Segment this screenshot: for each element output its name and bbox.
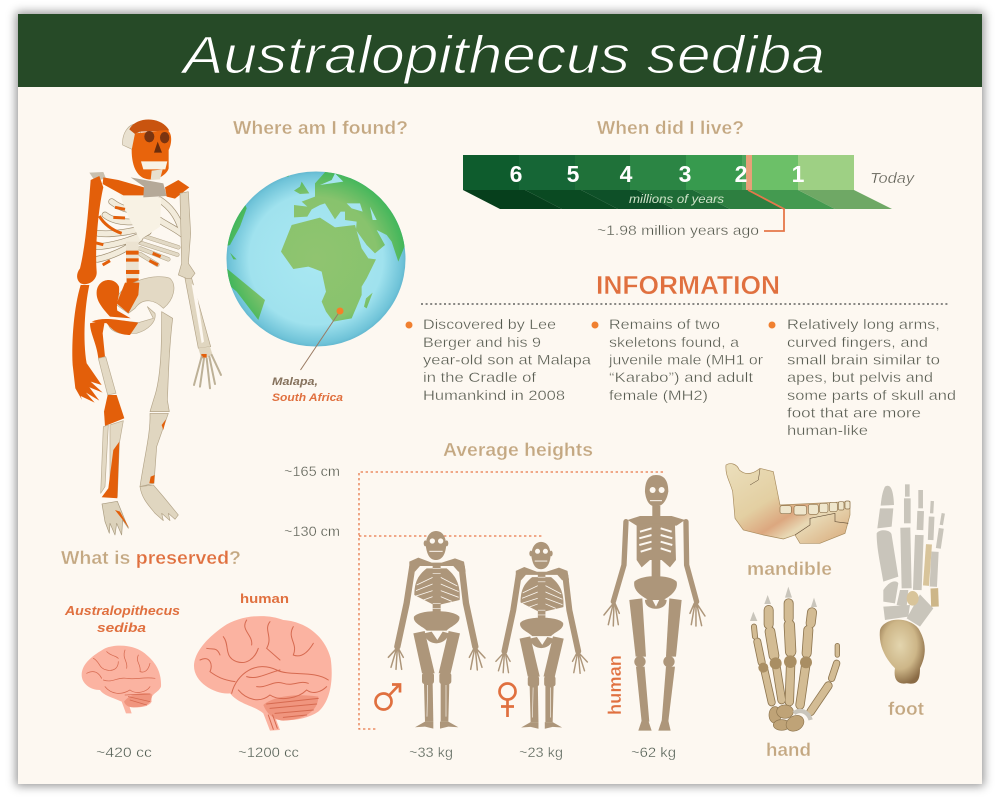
- information column 1: [406, 316, 591, 403]
- timeline numbers: [510, 161, 805, 187]
- pelvis: [92, 277, 174, 335]
- preserved arm: [72, 176, 103, 403]
- heading: what is preserved: What is preserved ?: [61, 548, 241, 568]
- information column 3: Relatively long arms,: [787, 316, 940, 332]
- information column 2: juvenile male (MH1 or: [608, 352, 763, 368]
- silhouette: sediba female: [496, 542, 587, 729]
- label: hand: hand: [766, 740, 811, 760]
- axis caption: millions of years: [629, 194, 724, 206]
- weight labels: ~23 kg: [519, 744, 563, 760]
- height guides: [359, 472, 663, 729]
- information column 1: in the Cradle of: [423, 369, 536, 385]
- date label: ~1.98 million years ago: [597, 222, 759, 238]
- information column 1: Berger and his 9: [423, 334, 541, 350]
- height label 130 cm: ~130 cm: [284, 523, 340, 539]
- information column 3: human-like: [787, 422, 868, 438]
- information column 2: female (MH2): [609, 387, 708, 403]
- today label: Today: [870, 170, 916, 187]
- heading: information: INFORMATION: [596, 270, 780, 300]
- timeline numbers: 6: [510, 161, 522, 187]
- brain volume labels: [96, 744, 299, 760]
- information column 1: year-old son at Malapa: [423, 352, 591, 368]
- female symbol: [500, 684, 516, 717]
- locator: Malapa: [272, 308, 344, 404]
- title: Australopithecus sediba: [180, 26, 825, 85]
- timeline numbers: 4: [620, 161, 633, 187]
- title banner: [18, 14, 982, 87]
- country label: South Africa: [272, 392, 343, 404]
- main skeleton with preserved bones: [72, 119, 221, 535]
- timeline numbers: 5: [567, 161, 580, 187]
- weight labels: [409, 744, 676, 760]
- label: mandible: mandible: [747, 559, 832, 579]
- information column 2: “Karabo”) and adult: [609, 369, 753, 385]
- heading: when did I live: When did I live?: [597, 118, 744, 138]
- information column 2: skeletons found, a: [609, 334, 739, 350]
- shoulders and ribcage: [89, 172, 189, 265]
- information column 2: [592, 316, 763, 403]
- heading: where am I found: Where am I found?: [233, 118, 408, 138]
- skull: [123, 119, 171, 180]
- silhouette: sediba male: [388, 531, 485, 729]
- weight labels: ~62 kg: [631, 744, 676, 760]
- small brain: [82, 646, 161, 713]
- information column 3: small brain similar to: [787, 352, 940, 368]
- large brain: [194, 616, 332, 731]
- label: sediba brain: [64, 603, 180, 635]
- timeline numbers: 1: [792, 161, 805, 187]
- globe: [225, 167, 410, 346]
- information column 2: Remains of two: [609, 316, 720, 332]
- brain volume labels: ~420 cc: [96, 744, 152, 760]
- label: human rotated: human: [605, 655, 625, 715]
- foot bones: [877, 484, 943, 684]
- spine: [126, 242, 139, 283]
- information column 3: some parts of skull and: [787, 387, 956, 403]
- label: human brain: human: [240, 591, 289, 606]
- right arm: [178, 192, 221, 388]
- information column 3: [768, 316, 956, 438]
- information column 3: foot that are more: [787, 404, 921, 420]
- left leg: [90, 320, 129, 535]
- weight labels: ~33 kg: [409, 744, 453, 760]
- brain volume labels: ~1200 cc: [238, 744, 299, 760]
- silhouette: human: [604, 475, 705, 731]
- label: sediba brain: sediba: [97, 620, 146, 635]
- mandible: [726, 464, 850, 543]
- male symbol: [376, 684, 400, 710]
- label: foot: foot: [888, 699, 924, 719]
- information column 3: apes, but pelvis and: [787, 369, 933, 385]
- information column 1: Humankind in 2008: [423, 387, 565, 403]
- label: sediba brain: Australopithecus: [64, 603, 180, 618]
- heading: average heights: Average heights: [443, 440, 593, 460]
- information column 3: curved fingers, and: [787, 334, 928, 350]
- right leg: [140, 312, 178, 521]
- timeline numbers: 3: [679, 161, 691, 187]
- hand bones: [750, 587, 837, 734]
- information column 1: Discovered by Lee: [423, 316, 556, 332]
- years marker line: [748, 190, 784, 231]
- timeline numbers: 2: [735, 161, 747, 187]
- height label 165 cm: ~165 cm: [284, 463, 340, 479]
- timeline: [463, 155, 916, 238]
- place label: Malapa,: [272, 376, 318, 388]
